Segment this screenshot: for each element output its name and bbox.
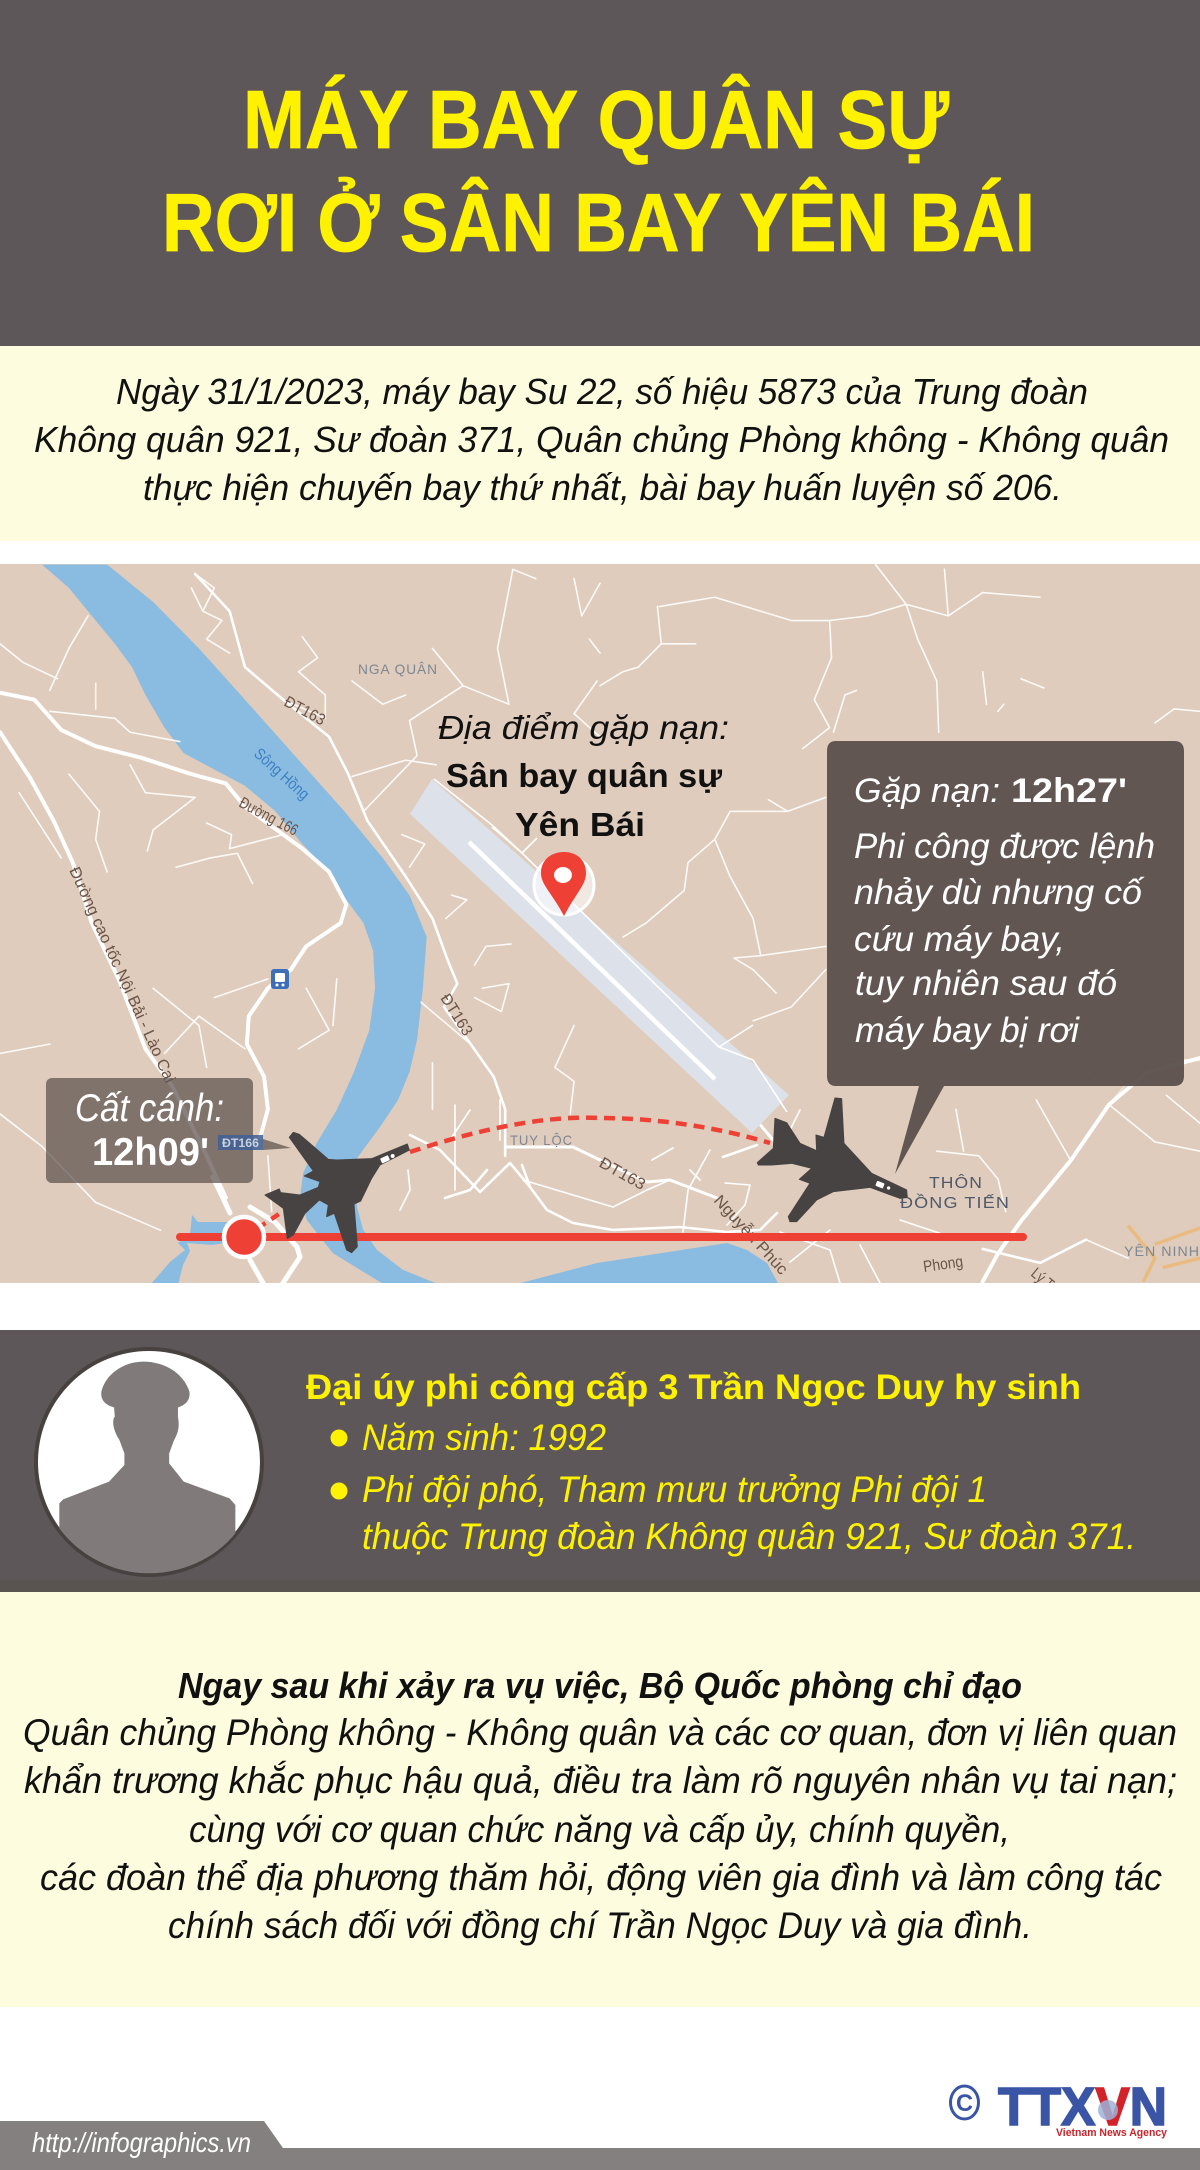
logo: TTXVN Vietnam News Agency: Vietnam News Agency — [1056, 2127, 1168, 2139]
pilot details list: Năm sinh: 1992 — [362, 1417, 606, 1458]
map water: Red River and lakes — [42, 565, 779, 1286]
panel: ministry directive — [0, 1592, 1200, 2007]
callout: crash details: 12h27' — [1011, 772, 1127, 810]
intro paragraph: Không quân 921, Sư đoàn 371, Quân chủng Phòng không - Không quân — [34, 419, 1169, 460]
directive body: các đoàn thể địa phương thăm hỏi, động viên gia đình và làm công tác — [40, 1857, 1162, 1898]
icon: bus stop — [271, 969, 289, 989]
airfield runway — [410, 779, 789, 1133]
panel: intro text — [0, 346, 1200, 541]
callout: takeoff time: Cất cánh: — [75, 1087, 224, 1130]
map place labels: Phong — [922, 1254, 964, 1276]
location pin — [534, 852, 594, 916]
portrait: pilot silhouette — [36, 1349, 262, 1575]
callout: crash details: Gặp nạn: — [854, 772, 1000, 810]
callout: crash details: máy bay bị rơi — [855, 1011, 1080, 1050]
pilot details list — [330, 1417, 1136, 1557]
callout: takeoff time — [46, 1078, 291, 1183]
icon: aircraft at crash site — [757, 1098, 907, 1222]
pilot details list: thuộc Trung đoàn Không quân 921, Sư đoàn 371. — [362, 1516, 1136, 1557]
callout: crash details: nhảy dù nhưng cố — [854, 873, 1145, 912]
intro paragraph: thực hiện chuyến bay thứ nhất, bài bay huấn luyện số 206. — [143, 467, 1062, 508]
map place labels: THÔN — [929, 1173, 983, 1192]
map roads — [0, 565, 1200, 1283]
logo: TTXVN Vietnam News Agency: C — [956, 2090, 973, 2117]
map place labels: Đường cao tốc Nội Bải - Lào Cai — [65, 865, 178, 1086]
title: MÁY BAY QUÂN SỰ — [243, 73, 949, 166]
directive body — [23, 1712, 1177, 1946]
callout: crash details: cứu máy bay, — [854, 920, 1065, 959]
callout: crash location label: Yên Bái — [515, 806, 645, 843]
directive body: khẩn trương khắc phục hậu quả, điều tra làm rõ nguyên nhân vụ tai nạn; — [24, 1760, 1177, 1801]
callout: crash details: tuy nhiên sau đó — [855, 964, 1117, 1003]
title — [162, 73, 1035, 269]
intro paragraph — [34, 371, 1169, 508]
title: RƠI Ở SÂN BAY YÊN BÁI — [162, 176, 1035, 269]
map place labels: Sông Hồng — [250, 745, 312, 803]
panel: map — [0, 564, 1200, 1294]
logo: TTXVN Vietnam News Agency: TTXVN — [998, 2077, 1167, 2137]
directive body: cùng với cơ quan chức năng và cấp ủy, chính quyền, — [189, 1809, 1010, 1850]
directive body: Quân chủng Phòng không - Không quân và các cơ quan, đơn vị liên quan — [23, 1712, 1177, 1753]
callout: crash details — [827, 741, 1184, 1174]
map place labels: Đường 166 — [236, 795, 301, 840]
map place labels: ĐT163 — [596, 1155, 648, 1194]
panel: pilot profile — [0, 1330, 1200, 1592]
callout: crash location label — [438, 709, 729, 843]
intro paragraph: Ngày 31/1/2023, máy bay Su 22, số hiệu 5873 của Trung đoàn — [116, 371, 1088, 412]
map place labels — [65, 661, 1200, 1294]
pilot name heading: Đại úy phi công cấp 3 Trần Ngọc Duy hy sinh — [306, 1368, 1081, 1407]
icon: aircraft taking off — [265, 1132, 409, 1253]
directive body: chính sách đối với đồng chí Trần Ngọc Duy và gia đình. — [168, 1905, 1032, 1946]
directive heading: Ngay sau khi xảy ra vụ việc, Bộ Quốc phòng chỉ đạo — [178, 1665, 1022, 1706]
map place labels: Nguyễn Phúc — [710, 1191, 792, 1278]
map place labels: ĐT163 — [437, 991, 475, 1039]
map place labels: ĐT163 — [281, 694, 328, 729]
panel: title header — [0, 0, 1200, 346]
website url: http://infographics.vn — [32, 2127, 251, 2158]
callout: crash location label: Sân bay quân sự — [446, 757, 722, 794]
map place labels: TUY LỘC — [510, 1132, 573, 1148]
map place labels: YÊN NINH — [1124, 1243, 1200, 1259]
route line — [180, 1118, 1023, 1237]
footer bar — [0, 2121, 1200, 2170]
callout: crash details: Phi công được lệnh — [854, 827, 1155, 866]
map place labels: NGA QUÂN — [358, 661, 438, 677]
map place labels: ĐỒNG TIẾN — [900, 1193, 1010, 1212]
callout: takeoff time: 12h09' — [92, 1131, 209, 1174]
callout: crash location label: Địa điểm gặp nạn: — [438, 709, 729, 746]
callout: takeoff time: ĐT166 — [222, 1136, 259, 1150]
takeoff point marker — [224, 1217, 264, 1257]
map place labels: Lý T — [1027, 1265, 1057, 1294]
pilot details list: Phi đội phó, Tham mưu trưởng Phi đội 1 — [362, 1469, 987, 1510]
